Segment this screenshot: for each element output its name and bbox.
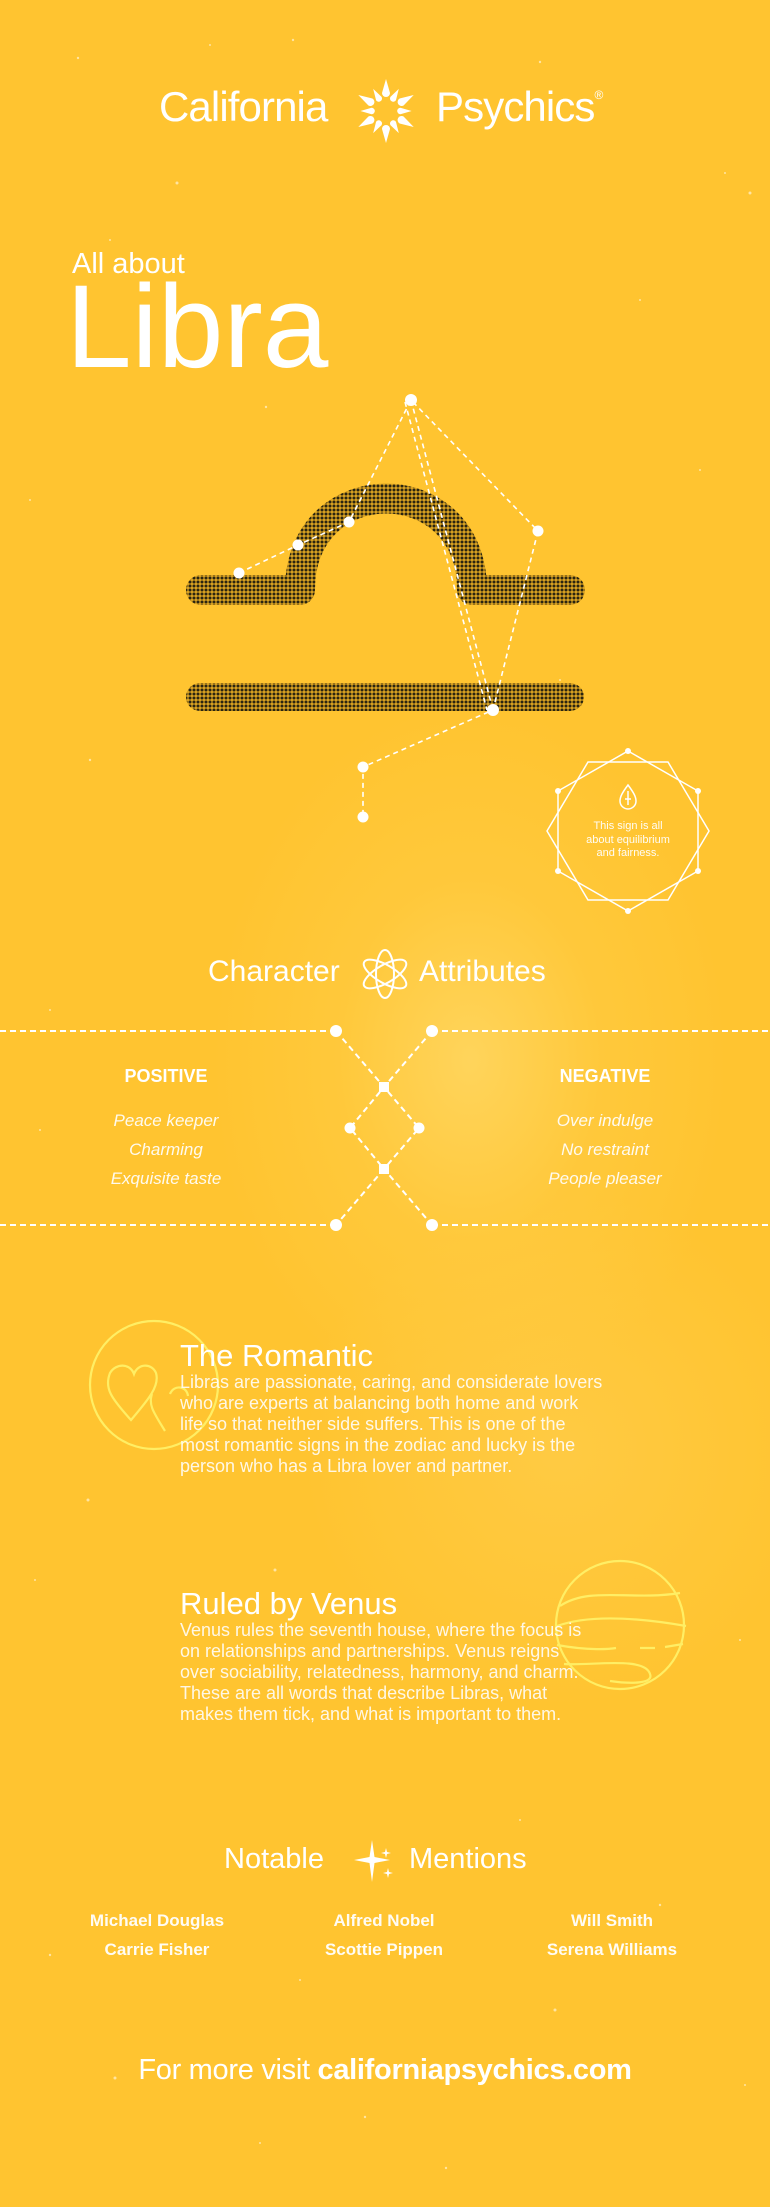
text block: The Romantic: who are experts at balancing both home and work bbox=[180, 1393, 578, 1413]
text: Will Smith bbox=[571, 1911, 653, 1930]
text block: The Romantic: The Romantic bbox=[180, 1338, 373, 1373]
icon: sparkle bbox=[354, 1840, 393, 1882]
heading: Notable Mentions: Notable bbox=[224, 1843, 324, 1875]
upper glyph bbox=[201, 498, 570, 590]
text block: The Romantic: person who has a Libra lover and partner. bbox=[180, 1456, 512, 1476]
title: All about: All about bbox=[72, 248, 185, 280]
text block: The Romantic: most romantic signs in the zodiac and lucky is the bbox=[180, 1435, 575, 1455]
badge: equilibrium hexagon bbox=[546, 748, 710, 914]
text block: The Romantic: Libras are passionate, caring, and considerate lovers bbox=[180, 1372, 602, 1392]
text: Serena Williams bbox=[547, 1940, 677, 1959]
footer: website: For more visit californiapsychics.com bbox=[138, 2054, 632, 2086]
heading: Character Attributes: Attributes bbox=[419, 955, 546, 988]
icon: drop bbox=[620, 785, 636, 809]
icon: venus planet bbox=[555, 1560, 686, 1690]
text block: The Romantic: life so that neither side suffers. This is one of the bbox=[180, 1414, 566, 1434]
text block: Ruled by Venus: These are all words that describe Libras, what bbox=[180, 1683, 547, 1703]
text: Scottie Pippen bbox=[325, 1940, 443, 1959]
panel: negative: People pleaser bbox=[548, 1169, 662, 1188]
panel: negative bbox=[548, 1066, 662, 1188]
badge text bbox=[586, 820, 670, 859]
title: Libra: Libra bbox=[66, 261, 328, 393]
panel: positive: Charming bbox=[129, 1140, 203, 1159]
text block: Ruled by Venus: on relationships and partnerships. Venus reigns bbox=[180, 1641, 559, 1661]
heading: Character Attributes bbox=[208, 949, 546, 999]
text block: Ruled by Venus: Ruled by Venus bbox=[180, 1586, 397, 1621]
heading: Character Attributes: Character bbox=[208, 955, 340, 988]
logo text left: California bbox=[159, 83, 327, 130]
panel: negative: Over indulge bbox=[557, 1111, 653, 1130]
panel: positive: Peace keeper bbox=[114, 1111, 218, 1130]
panel: positive: POSITIVE bbox=[124, 1066, 208, 1086]
panel: negative: NEGATIVE bbox=[560, 1066, 650, 1086]
text: Carrie Fisher bbox=[105, 1940, 209, 1959]
text: Alfred Nobel bbox=[333, 1911, 435, 1930]
panel: negative: No restraint bbox=[561, 1140, 649, 1159]
logo: California Psychics bbox=[159, 79, 604, 143]
panel: positive bbox=[111, 1066, 221, 1188]
names list bbox=[90, 1911, 677, 1959]
badge text: and fairness. bbox=[596, 847, 659, 859]
logo text right: Psychics® bbox=[436, 83, 602, 130]
text block: Ruled by Venus: makes them tick, and what is important to them. bbox=[180, 1704, 561, 1724]
text block: Ruled by Venus: over sociability, relatedness, harmony, and charm. bbox=[180, 1662, 579, 1682]
heading: Notable Mentions: Mentions bbox=[409, 1843, 527, 1875]
heading: Notable Mentions bbox=[224, 1840, 527, 1882]
icon: hearts circle bbox=[88, 1320, 220, 1450]
text block: Ruled by Venus bbox=[180, 1586, 581, 1724]
panel: positive: Exquisite taste bbox=[111, 1169, 221, 1188]
lower bar bbox=[186, 683, 584, 711]
constellation bbox=[239, 400, 538, 817]
badge text: about equilibrium bbox=[586, 834, 670, 846]
text block: The Romantic bbox=[180, 1338, 602, 1476]
text: Michael Douglas bbox=[90, 1911, 224, 1930]
icon: sun flower bbox=[358, 79, 414, 143]
attributes diagram bbox=[0, 1025, 768, 1231]
icon: atom bbox=[362, 949, 408, 999]
text block: Ruled by Venus: Venus rules the seventh house, where the focus is bbox=[180, 1620, 581, 1640]
libra symbol with constellation bbox=[186, 394, 585, 822]
badge text: This sign is all bbox=[593, 820, 663, 832]
